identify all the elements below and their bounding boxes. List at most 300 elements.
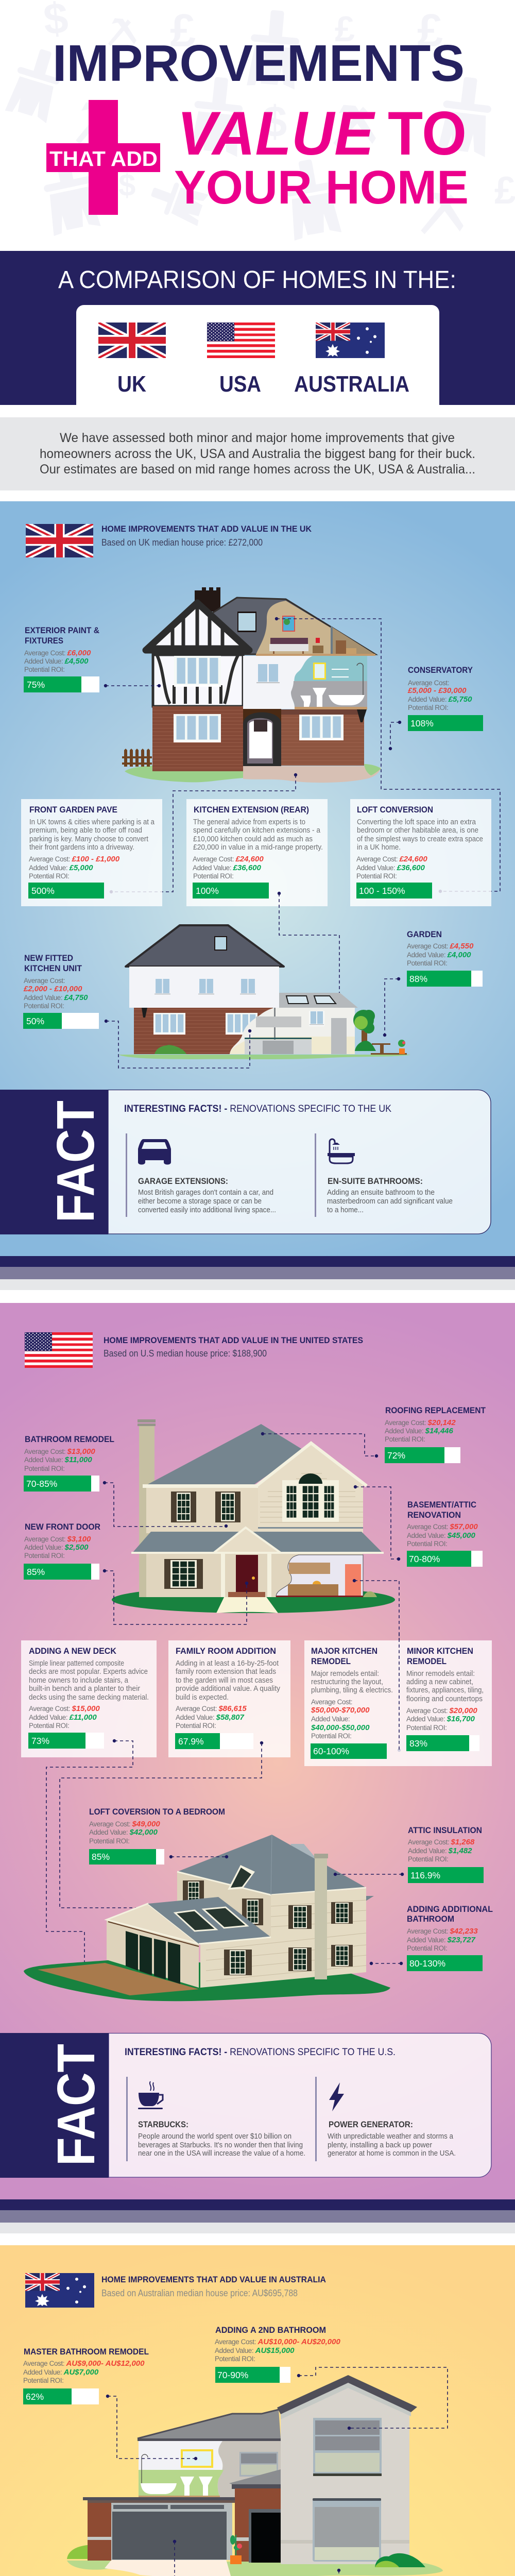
connector: master bathroom <box>106 2395 197 2460</box>
window lower right <box>299 715 344 740</box>
fact: starbucks <box>138 2120 305 2158</box>
panel: comparison of homes <box>0 251 515 405</box>
USA section heading: HOME IMPROVEMENTS THAT ADD VALUE IN THE UNITED STATES <box>104 1335 363 1345</box>
fact: starbucks: STARBUCKS: <box>138 2120 188 2129</box>
card: family room addition: to the garden will in most cases <box>176 1676 273 1685</box>
callout: attic insulation: Potential ROI: <box>408 1855 448 1863</box>
fact: starbucks: near one in the USA will increase the value of a home. <box>138 2149 305 2158</box>
connector: new fitted kitchen <box>105 1020 251 1068</box>
callout: adding a 2nd bathroom: Average Cost: AU$10,000- AU$20,000 <box>215 2337 340 2346</box>
fact label: FACT <box>46 2044 106 2166</box>
callout: basement attic renovation: Average Cost: $57,000 <box>407 1522 478 1531</box>
callout: new front door: Potential ROI: <box>24 1552 64 1560</box>
card: front garden pave: 500% <box>31 886 55 896</box>
fact label: FACT <box>46 1100 105 1223</box>
major kitchen remodel: MAJOR KITCHEN <box>311 1646 377 1656</box>
callout: bathroom remodel: BATHROOM REMODEL <box>25 1434 114 1444</box>
connector: minor kitchen <box>353 1579 401 1752</box>
callout: attic insulation <box>408 1825 484 1883</box>
connector: exterior paint <box>104 684 161 687</box>
major kitchen remodel: REMODEL <box>311 1656 351 1666</box>
fence <box>122 749 152 767</box>
illustration: USA rear house <box>24 1835 390 2001</box>
flag: Australia <box>316 323 385 358</box>
roof <box>126 925 284 967</box>
upper wall <box>129 967 279 1008</box>
right wall <box>200 1889 366 1988</box>
card: loft conversion: Added Value: £36,600 <box>356 863 425 872</box>
icon: bathtub <box>328 1139 355 1163</box>
card: family room addition: Potential ROI: <box>176 1722 216 1730</box>
fact: power generator <box>328 2120 456 2158</box>
callout: basement attic renovation: Potential ROI: <box>407 1540 447 1548</box>
callout: new fitted kitchen unit: £2,000 - £10,000 <box>23 985 82 993</box>
card: family room addition: FAMILY ROOM ADDITION <box>176 1646 276 1656</box>
icon: coffee cup <box>138 2081 163 2109</box>
connector: curb appeal <box>278 2569 340 2576</box>
callout: loft conversion to bedroom: LOFT COVERSION TO A BEDROOM <box>89 1807 225 1817</box>
porch roof <box>229 2469 281 2484</box>
minor kitchen remodel: REMODEL <box>407 1656 447 1666</box>
icon: car <box>138 1139 171 1164</box>
card: family room addition: Average Cost: $86,615 <box>176 1704 247 1713</box>
plants <box>67 2535 425 2567</box>
callout: adding a 2nd bathroom: ADDING A 2ND BATHROOM <box>215 2325 326 2335</box>
divider bands: after USA <box>0 2199 515 2233</box>
card: kitchen extension: Potential ROI: <box>193 872 233 880</box>
tree and patio <box>362 1030 367 1046</box>
fact: en-suite bathrooms: masterbedroom can add significant value <box>327 1197 453 1206</box>
flag: UK <box>98 323 166 358</box>
card: loft conversion: of the simplest ways to create extra space <box>357 835 483 843</box>
background pattern of tools and currency: £ <box>417 5 443 57</box>
master bathroom cutaway <box>139 2441 224 2498</box>
callout: roofing replacement: 72% <box>387 1450 405 1461</box>
tall wing upper window <box>313 2418 382 2476</box>
window upper right <box>256 664 280 683</box>
minor kitchen remodel: Potential ROI: <box>406 1724 447 1732</box>
label: Australia: AUSTRALIA <box>294 371 409 397</box>
windows on left wall <box>183 1880 263 1925</box>
callout: adding additional bathroom: Added Value: $23,727 <box>407 1936 476 1944</box>
connector: front garden pave <box>110 773 297 893</box>
major kitchen remodel: Added Value: <box>311 1715 350 1723</box>
ground <box>118 1055 410 1059</box>
flag: UK heading <box>26 524 93 557</box>
connector: additional bathroom <box>370 1962 403 1965</box>
callout: master bathroom remodel: Potential ROI: <box>23 2377 63 2384</box>
fact: en-suite bathrooms: EN-SUITE BATHROOMS: <box>328 1176 423 1186</box>
callout: basement attic renovation: 70-80% <box>409 1554 440 1564</box>
card: new deck: home owners to include stairs, a <box>29 1676 129 1685</box>
sliding doors <box>126 1931 180 1984</box>
callout: bathroom remodel: Average Cost: $13,000 <box>24 1447 95 1456</box>
callout: new fitted kitchen unit: KITCHEN UNIT <box>24 963 82 973</box>
callout: new front door: Added Value: $2,500 <box>24 1543 89 1552</box>
rooflights on extension <box>175 1910 216 1931</box>
callout: master bathroom remodel: Average Cost: AU$9,000- AU$12,000 <box>23 2359 145 2368</box>
card: front garden pave: In UK towns & cities where parking is at a <box>29 818 155 826</box>
card: kitchen remodels <box>304 1640 492 1766</box>
skylight on main roof <box>228 1865 255 1890</box>
connector: kitchen extension <box>278 892 341 1031</box>
callout: garden: 88% <box>409 974 427 984</box>
callout: attic insulation: 116.9% <box>410 1870 440 1880</box>
connector: loft to bedroom <box>169 1855 228 1858</box>
card: front garden pave: parking is key. Many choose to convert <box>29 835 148 843</box>
illustration: USA front house <box>112 1419 395 1613</box>
main roof <box>177 1835 366 1895</box>
callout: roofing replacement: Added Value: $14,446 <box>385 1427 454 1435</box>
minor kitchen remodel <box>406 1646 484 1751</box>
card: kitchen extension <box>186 799 328 906</box>
major kitchen remodel: Potential ROI: <box>311 1732 351 1740</box>
fact: en-suite bathrooms: to a home... <box>327 1206 364 1214</box>
callout: garden: Average Cost: £4,550 <box>407 942 474 951</box>
card: family room addition: build is expected. <box>176 1693 229 1702</box>
card: new deck: Potential ROI: <box>29 1722 69 1730</box>
callout: adding a 2nd bathroom: Potential ROI: <box>215 2355 255 2363</box>
header: title block <box>5 0 515 241</box>
connector: new deck <box>46 1739 133 1975</box>
UK section heading: HOME IMPROVEMENTS THAT ADD VALUE IN THE UK <box>101 524 312 534</box>
flag: Australia heading <box>25 2273 94 2308</box>
major kitchen remodel: restructuring the layout, <box>311 1678 383 1686</box>
fact: garage extensions: converted easily into additional living space... <box>138 1206 276 1214</box>
card: kitchen extension: £20,000 in value in a mid-range property. <box>193 843 323 852</box>
callout: exterior paint: FIXTURES <box>25 636 63 646</box>
label: USA: USA <box>219 371 261 397</box>
card: new deck: Added Value: £11,000 <box>29 1713 97 1722</box>
callout: new fitted kitchen unit: NEW FITTED <box>24 953 73 963</box>
callout: adding a 2nd bathroom: 70-90% <box>217 2370 248 2380</box>
callout: exterior paint: Average Cost: £6,000 <box>24 649 91 657</box>
callout: master bathroom remodel: 62% <box>26 2392 44 2402</box>
minor kitchen remodel: flooring and countertops <box>406 1695 483 1703</box>
callout: bathroom remodel: 70-85% <box>26 1479 57 1489</box>
card: loft conversion: in a UK home. <box>357 843 401 852</box>
connector: loft conversion <box>275 617 500 893</box>
card: front garden pave: Potential ROI: <box>29 872 69 880</box>
timber upper storey <box>153 655 243 706</box>
skylight <box>237 612 256 632</box>
chimney <box>195 587 220 612</box>
card: front garden pave: premium, being able to offer off road <box>29 826 142 835</box>
fact heading: INTERESTING FACTS! - RENOVATIONS SPECIFIC TO THE U.S. <box>125 2047 396 2058</box>
callout: master bathroom remodel: MASTER BATHROOM REMODEL <box>24 2347 149 2357</box>
attic cutaway <box>256 601 375 654</box>
callout: loft conversion to bedroom: Added Value: $42,000 <box>89 1828 158 1837</box>
card: loft conversion: LOFT CONVERSION <box>357 805 433 815</box>
callout: new fitted kitchen unit: Added Value: £4,750 <box>24 993 88 1002</box>
major kitchen remodel: $50,000-$70,000 <box>311 1706 370 1715</box>
upper left wall <box>139 2441 281 2498</box>
callout: conservatory: CONSERVATORY <box>408 665 473 675</box>
window lower left <box>173 714 221 742</box>
callout: conservatory: Potential ROI: <box>408 704 448 711</box>
callout: garden: Potential ROI: <box>407 959 447 967</box>
tall wing lower window <box>313 2498 381 2562</box>
plus sign with that add <box>46 100 160 215</box>
callout: master bathroom remodel: Added Value: AU$7,000 <box>23 2368 99 2377</box>
ground <box>125 766 243 782</box>
callout: exterior paint: EXTERIOR PAINT & <box>25 625 99 635</box>
major kitchen remodel: Average Cost: <box>311 1698 352 1706</box>
card: family room addition: Added Value: $58,807 <box>176 1713 245 1722</box>
ground <box>112 1586 395 1613</box>
background pattern of tools and currency: $ <box>118 168 135 202</box>
card: loft conversion: Potential ROI: <box>356 872 397 880</box>
card: family room addition: family room extension that leads <box>176 1668 276 1676</box>
fact: garage extensions: Most British garages don't contain a car, and <box>138 1188 273 1197</box>
left wall <box>177 1872 271 1938</box>
fact: en-suite bathrooms <box>327 1176 453 1214</box>
illustration: UK rear house <box>118 925 410 1059</box>
card: new deck: Simple linear patterned composite <box>29 1659 124 1668</box>
callout: bathroom remodel: Added Value: $11,000 <box>24 1455 92 1464</box>
background pattern of tools and currency <box>5 0 515 241</box>
upper window left <box>174 656 221 687</box>
card: front garden pave: FRONT GARDEN PAVE <box>29 805 117 815</box>
card: front garden pave: Added Value: £5,000 <box>29 863 93 872</box>
callout: basement attic renovation <box>407 1500 483 1567</box>
main roof <box>148 1424 304 1484</box>
fact: starbucks: People around the world spent over $10 billion on <box>138 2132 291 2141</box>
panel: UK section <box>0 501 515 1256</box>
connector: new front door <box>103 1569 248 1624</box>
callout: roofing replacement: Potential ROI: <box>385 1435 425 1443</box>
lower wall <box>146 1554 363 1597</box>
minor kitchen remodel: MINOR KITCHEN <box>407 1646 473 1656</box>
callout: adding additional bathroom: Average Cost: $42,233 <box>407 1927 478 1936</box>
fact panel: USA <box>0 2033 491 2178</box>
callout: adding a 2nd bathroom: Added Value: AU$15,000 <box>215 2346 295 2355</box>
connector: 2nd bathroom <box>297 2367 448 2430</box>
callout: basement attic renovation: BASEMENT/ATTIC <box>407 1500 476 1510</box>
illustration: UK front house <box>122 587 381 783</box>
fact: power generator: generator at home is common in the USA. <box>328 2149 456 2158</box>
fact: power generator: POWER GENERATOR: <box>329 2120 413 2129</box>
callout: basement attic renovation: Added Value: $45,000 <box>407 1531 476 1540</box>
callout: basement attic renovation: RENOVATION <box>407 1510 461 1520</box>
card: loft conversion: Average Cost: £24,600 <box>356 855 427 863</box>
right gable <box>258 1441 363 1533</box>
title line: value: VALUE <box>177 99 376 168</box>
connector: roofing replacement <box>261 1432 378 1458</box>
callout: attic insulation: Added Value: $1,482 <box>408 1846 472 1855</box>
callout: new fitted kitchen unit <box>23 953 99 1029</box>
flag: USA heading <box>25 1332 93 1368</box>
card: family room addition: Adding in at least a 16-by-25-foot <box>176 1659 279 1668</box>
connector: enclosed garage <box>111 2540 176 2576</box>
background pattern of tools and currency: $ <box>263 97 287 146</box>
card: new deck: built-in bench and a planter to their <box>29 1685 140 1693</box>
card: new deck <box>21 1640 157 1757</box>
callout: roofing replacement: ROOFING REPLACEMENT <box>385 1405 486 1415</box>
minor kitchen remodel: Average Cost: $20,000 <box>406 1706 477 1715</box>
callout: bathroom remodel <box>24 1434 114 1492</box>
upper left roof <box>138 2410 281 2438</box>
card: new deck: 73% <box>31 1736 49 1746</box>
background pattern of tools and currency: £ <box>335 9 355 49</box>
chimney <box>139 1426 154 1597</box>
small window <box>239 2452 278 2477</box>
background pattern of tools and currency: £ <box>170 5 196 57</box>
kitchen cutaway <box>230 1008 355 1054</box>
chimney <box>315 1858 327 1979</box>
callout: loft conversion to bedroom: Potential ROI: <box>89 1837 129 1845</box>
minor kitchen remodel: Minor remodels entail: <box>406 1670 475 1678</box>
panel: Australia section <box>0 2245 515 2576</box>
callout: new front door: 85% <box>27 1567 45 1577</box>
extension <box>107 1920 199 1988</box>
card: front garden pave <box>21 799 162 906</box>
kitchen extension roof <box>279 993 358 1008</box>
fact: garage extensions <box>138 1176 276 1214</box>
callout: conservatory: £5,000 - £30,000 <box>407 686 467 695</box>
callout: new fitted kitchen unit: Potential ROI: <box>24 1002 64 1010</box>
USA section subheading: Based on U.S median house price: $188,900 <box>104 1348 267 1359</box>
callout: roofing replacement: Average Cost: $20,142 <box>385 1418 456 1427</box>
callout: conservatory: 108% <box>410 718 434 728</box>
icon: lightning bolt <box>329 2082 344 2111</box>
bathroom cutaway <box>291 656 367 709</box>
porch roof <box>132 1532 383 1553</box>
door and columns <box>221 1554 271 1597</box>
card: kitchen extension: spend carefully on kitchen extensions - a <box>193 826 321 835</box>
fact heading: INTERESTING FACTS! - RENOVATIONS SPECIFIC TO THE UK <box>124 1104 391 1114</box>
major kitchen remodel: Major remodels entail: <box>311 1670 379 1678</box>
callout: exterior paint <box>24 625 99 692</box>
card: loft conversion: Converting the loft space into an extra <box>357 818 476 826</box>
divider bands: after UK <box>0 1256 515 1290</box>
callout: new front door: NEW FRONT DOOR <box>25 1522 100 1532</box>
callout: adding additional bathroom <box>407 1904 493 1971</box>
card: front garden pave: Average Cost: £100 - £1,000 <box>29 855 120 863</box>
fact: starbucks: beverages at Starbucks. It's no wonder then that living <box>138 2141 303 2149</box>
lower left window <box>164 1559 203 1589</box>
card: new deck: decks using the same decking material. <box>29 1693 149 1702</box>
connector: minor kitchen segment <box>399 1633 400 1750</box>
porch brick and door <box>235 2488 281 2562</box>
panel: USA section <box>0 1303 515 2199</box>
callout: conservatory: Average Cost: <box>408 679 449 687</box>
fact panel: UK <box>0 1090 491 1234</box>
Australia section heading: HOME IMPROVEMENTS THAT ADD VALUE IN AUSTRALIA <box>101 2275 326 2284</box>
intro text panel: homeowners across the UK, USA and Australia the biggest bang for their buck. <box>40 447 475 461</box>
fact: garage extensions: GARAGE EXTENSIONS: <box>138 1176 228 1186</box>
major kitchen remodel: $40,000-$50,000 <box>311 1723 370 1732</box>
card: kitchen extension: KITCHEN EXTENSION (REAR) <box>194 805 309 815</box>
card: family room addition: 67.9% <box>178 1736 204 1747</box>
title line: to: TO <box>388 99 467 168</box>
card: new deck: ADDING A NEW DECK <box>29 1646 117 1656</box>
deck <box>38 1963 199 1995</box>
callout: exterior paint: 75% <box>27 680 45 690</box>
illustration: Australia front house <box>67 2375 443 2576</box>
callout: loft conversion to bedroom <box>89 1807 225 1865</box>
connector: family room <box>60 1741 263 1909</box>
flag: USA <box>207 323 275 358</box>
card: front garden pave: their front gardens into a driveway. <box>29 843 134 852</box>
callout: attic insulation: ATTIC INSULATION <box>408 1825 482 1835</box>
minor kitchen remodel: fixtures, appliances, tiling, <box>406 1686 484 1694</box>
callout: master bathroom remodel <box>23 2347 149 2404</box>
tudor gable <box>146 603 249 650</box>
label: UK: UK <box>117 371 146 397</box>
callout: garden <box>407 929 483 987</box>
connector: bathroom remodel <box>103 1481 228 1528</box>
garage <box>83 2497 235 2561</box>
windows on right wall <box>224 1902 353 1975</box>
UK section subheading: Based on UK median house price: £272,000 <box>101 537 263 548</box>
fact: en-suite bathrooms: Adding an ensuite bathroom to the <box>327 1188 435 1197</box>
front door <box>243 709 281 766</box>
callout: garden: GARDEN <box>407 929 442 939</box>
callout: adding additional bathroom: BATHROOM <box>407 1914 454 1924</box>
card: loft conversion: bedroom or other habitable area, is one <box>357 826 478 835</box>
major kitchen remodel: plumbing, tiling & electrics. <box>311 1686 393 1694</box>
card: kitchen extension: Added Value: £36,600 <box>193 863 262 872</box>
brick ground floor <box>152 706 367 771</box>
lower brick <box>134 1008 273 1054</box>
callout: adding a 2nd bathroom <box>215 2325 340 2383</box>
card: kitchen extension: 100% <box>196 886 219 896</box>
card: new deck: decks are most popular. Experts advice <box>29 1668 148 1676</box>
callout: adding additional bathroom: Potential ROI: <box>407 1944 447 1952</box>
kitchen cutaway <box>276 1555 363 1597</box>
callout: loft conversion to bedroom: 85% <box>92 1852 110 1862</box>
ground <box>67 2561 112 2570</box>
arched window <box>282 1473 339 1522</box>
card: kitchen extension: Average Cost: £24,600 <box>193 855 264 863</box>
connector: attic insulation <box>334 1873 404 1876</box>
fact: garage extensions: either become a storage space or can be <box>138 1197 262 1206</box>
card: kitchen extension: £10,000 kitchen could add as much as <box>193 835 313 843</box>
bedroom <box>269 616 323 654</box>
comparison heading: A COMPARISON OF HOMES IN THE: <box>58 266 456 294</box>
connector: conservatory <box>389 721 401 750</box>
Australia section subheading: Based on Australian median house price: AU$695,788 <box>101 2288 298 2298</box>
callout: adding additional bathroom: ADDING ADDITIONAL <box>407 1904 493 1914</box>
card: loft conversion: 100 - 150% <box>359 886 405 896</box>
card: new deck: Average Cost: $15,000 <box>29 1704 100 1713</box>
back roof <box>290 1844 315 1875</box>
minor kitchen remodel: Added Value: $16,700 <box>406 1715 475 1723</box>
major kitchen remodel <box>311 1646 393 1759</box>
title line: your home: YOUR HOME <box>174 161 469 214</box>
upper wall <box>146 1487 260 1533</box>
callout: new front door: Average Cost: $3,100 <box>24 1535 91 1544</box>
callout: conservatory: Added Value: £5,750 <box>408 695 472 704</box>
plus sign with that add: THAT ADD <box>49 147 158 171</box>
tall wing <box>281 2378 409 2564</box>
callout: new front door <box>24 1522 100 1580</box>
callout: bathroom remodel: Potential ROI: <box>24 1465 64 1472</box>
minor kitchen remodel: 83% <box>409 1738 427 1749</box>
card: kitchen extension: The general advice from experts is to <box>193 818 305 826</box>
intro text panel: Our estimates are based on mid range homes across the UK, USA & Australia... <box>40 462 475 477</box>
callout: loft conversion to bedroom: Average Cost: $49,000 <box>89 1820 160 1828</box>
connector: garden <box>383 977 400 1037</box>
porch gable <box>214 1528 281 1553</box>
card: family room addition: provide additional value. A quality <box>176 1685 281 1693</box>
callout: exterior paint: Potential ROI: <box>24 666 64 673</box>
minor kitchen remodel: adding a new cabinet, <box>406 1678 473 1686</box>
callout: garden: Added Value: £4,000 <box>407 951 471 959</box>
callout: new fitted kitchen unit: Average Cost: <box>24 977 65 985</box>
intro text panel <box>0 417 515 490</box>
